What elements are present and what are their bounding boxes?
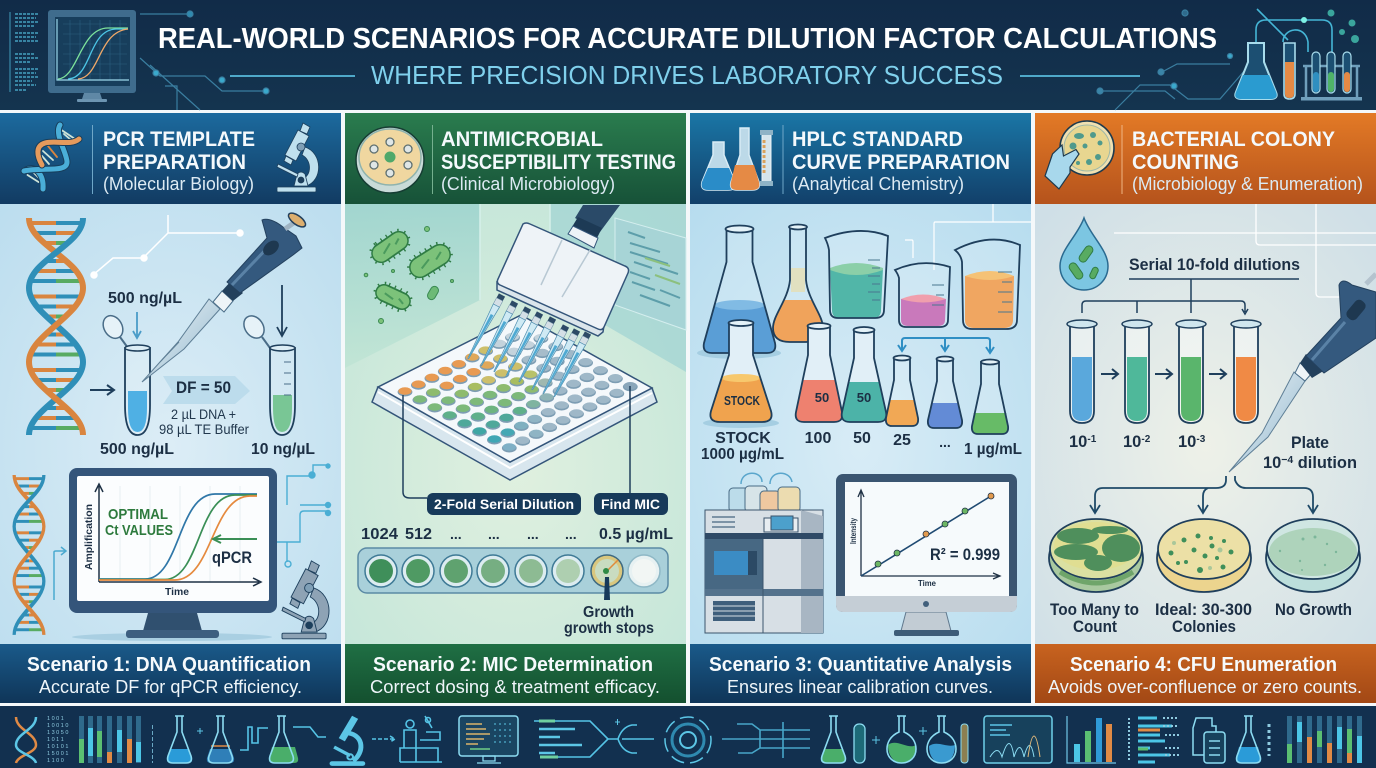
- heading text: CURVE PREPARATION: [792, 151, 1010, 174]
- dilution labels: 10: [1069, 433, 1087, 451]
- icon: DNA and data bars: 1 0 0 1 0: [47, 723, 68, 729]
- dish labels: Ideal: 30-300: [1155, 601, 1252, 619]
- scenario footer: Ensures linear calibration curves.: [727, 677, 993, 697]
- large DNA helix: [29, 218, 83, 435]
- label: growth stops: Growth: [583, 604, 634, 621]
- icon: bottles and clipboard: [1193, 718, 1225, 763]
- plate wells: [398, 333, 638, 452]
- icon: DNA and data bars: 1 0 1 1: [47, 737, 64, 743]
- microscope: [282, 561, 329, 639]
- icon: data bars right: [1287, 716, 1362, 763]
- badge: 2-fold serial dilution: [427, 493, 581, 515]
- flask: blue small: [928, 356, 962, 428]
- flask concentration labels: 1 µg/mL: [964, 441, 1022, 458]
- panel: HPLC standard curve preparation: [690, 113, 1031, 703]
- flask: green small: [972, 360, 1008, 434]
- flask concentration labels: STOCK: [715, 430, 771, 447]
- icon: circuit lines: [722, 722, 810, 758]
- heading text: PCR TEMPLATE: [103, 128, 255, 151]
- heading text: (Molecular Biology): [103, 174, 254, 194]
- dish labels: Too Many to: [1050, 601, 1139, 619]
- water droplet with bacteria: [1060, 218, 1108, 290]
- circuit traces right: [277, 464, 330, 567]
- scenario footer: Scenario 1: DNA Quantification: [27, 654, 311, 676]
- concentration labels: 1024: [361, 526, 398, 543]
- flask: 50: [842, 327, 886, 422]
- arrow: DNA to tube: [90, 385, 114, 395]
- dish labels: No Growth: [1275, 601, 1352, 619]
- qPCR chart: Time: [165, 586, 189, 598]
- circuit decoration: [91, 215, 243, 278]
- scenario footer: Accurate DF for qPCR efficiency.: [39, 677, 302, 697]
- flask: stock: STOCK: [724, 394, 760, 408]
- label: plate dilution: dilution: [1293, 454, 1357, 472]
- scenario footer: [0, 644, 341, 703]
- dilution factor callout: [159, 376, 250, 437]
- dish labels: [1050, 601, 1352, 636]
- qPCR chart: Ct VALUES: [105, 522, 173, 539]
- pipette: [1229, 274, 1376, 472]
- flask concentration labels: ...: [939, 434, 951, 450]
- dish: ideal colonies: [1157, 519, 1251, 592]
- flask concentration labels: 1000 µg/mL: [701, 446, 784, 463]
- panel heading bar: [690, 113, 1031, 204]
- icon: microscope: [332, 717, 363, 764]
- qPCR chart: Amplification: [83, 504, 95, 570]
- icon: data lines converging: [534, 719, 654, 757]
- qPCR chart: qPCR: [212, 549, 252, 567]
- icon: flasks and test tubes: [1235, 9, 1362, 100]
- panel heading bar: [1035, 113, 1376, 204]
- label: final concentration: 10 ng/µL: [251, 441, 315, 458]
- heading text: [103, 128, 255, 194]
- icon: lab workstation: [400, 716, 442, 762]
- heading text: SUSCEPTIBILITY TESTING: [441, 151, 676, 174]
- dilution factor callout: 98 µL TE Buffer: [159, 422, 249, 437]
- icon: bar chart: [1067, 716, 1116, 763]
- panel heading bar: [0, 113, 341, 204]
- panel heading bar: [345, 113, 686, 204]
- diluted tube: [240, 312, 295, 435]
- panel: PCR template preparation: [0, 113, 341, 703]
- icon: flasks and column: [702, 128, 773, 190]
- label: plate dilution: [1263, 434, 1357, 472]
- panel: bacterial colony counting: [1035, 113, 1376, 703]
- scenario footer: Scenario 3: Quantitative Analysis: [709, 654, 1012, 676]
- dilution tubes: [1067, 320, 1261, 423]
- dilution labels: -3: [1196, 434, 1206, 445]
- heading text: ANTIMICROBIAL: [441, 128, 603, 151]
- circuit decoration: [1114, 204, 1376, 297]
- badge: find MIC: [594, 493, 668, 515]
- qPCR monitor: [69, 468, 277, 641]
- flask: 50: 50: [857, 390, 871, 405]
- icon: monitor with amplification curves: [10, 10, 136, 102]
- icon: DNA and data bars: 1 3 0 5 0: [47, 730, 68, 736]
- bacteria illustration: [364, 226, 454, 324]
- concentration labels: ...: [488, 526, 500, 542]
- icon: DNA helix: [24, 125, 79, 189]
- icon: petri dish with discs: [356, 127, 424, 193]
- dilution labels: [1069, 433, 1206, 451]
- data screen on wall: [615, 218, 686, 330]
- title: REAL-WORLD SCENARIOS FOR ACCURATE DILUTION FACTOR CALCULATIONS: [158, 23, 1217, 55]
- subtitle: WHERE PRECISION DRIVES LABORATORY SUCCESS: [371, 60, 1003, 90]
- dish labels: Count: [1073, 618, 1117, 636]
- beaker: pink: [895, 263, 950, 327]
- label: plate dilution: 10: [1263, 454, 1281, 472]
- scenario footer: Correct dosing & treatment efficacy.: [370, 677, 660, 697]
- flask: 100: [796, 323, 842, 422]
- icon: DNA and data bars: 1 1 0 0: [47, 758, 64, 764]
- heading text: [1132, 128, 1363, 194]
- flask: blue Erlenmeyer: [697, 226, 781, 359]
- icon: target circle: [665, 717, 711, 763]
- HPLC instrument: [705, 473, 823, 633]
- flask: volumetric orange: [773, 224, 823, 342]
- flask concentration labels: 100: [805, 430, 831, 447]
- dilution labels: -1: [1087, 434, 1097, 445]
- qPCR chart: [83, 484, 261, 598]
- heading text: [792, 128, 1010, 194]
- MIC well strip: [358, 548, 668, 600]
- icon: flasks and tubes: [821, 716, 968, 763]
- icon: gloved hand holding dish: [1045, 121, 1114, 189]
- dish: no growth: [1266, 519, 1360, 592]
- qPCR chart: OPTIMAL: [108, 506, 168, 523]
- heading: serial dilutions: Serial 10-fold dilutions: [1129, 255, 1300, 274]
- icon: chromatogram screen: [984, 716, 1052, 763]
- header banner: [0, 0, 1376, 110]
- label: plate dilution: Plate: [1291, 434, 1329, 452]
- scenario footer: Avoids over-confluence or zero counts.: [1048, 677, 1362, 697]
- circuit decoration: [905, 204, 1031, 270]
- dilution labels: -2: [1141, 434, 1151, 445]
- flask: 25: [886, 356, 918, 426]
- scenario footer: [690, 644, 1031, 703]
- pipette tips: [465, 293, 591, 398]
- beaker: orange: [955, 240, 1020, 329]
- dilution labels: 10: [1123, 433, 1141, 451]
- icon: DNA and data bars: 1 5 0 0 1: [47, 751, 68, 757]
- heading text: [441, 128, 676, 194]
- 96-well plate: [372, 315, 657, 480]
- callout line: 2-fold: [403, 395, 427, 498]
- concentration labels: 0.5 µg/mL: [599, 526, 673, 543]
- arrows: distribute to flasks: [898, 338, 994, 353]
- concentration labels: ...: [450, 526, 462, 542]
- label: growth stops: growth stops: [564, 620, 654, 637]
- label: stock concentration: 500 ng/µL: [108, 290, 182, 307]
- concentration labels: ...: [527, 526, 539, 542]
- bottom icon strip: [0, 706, 1376, 768]
- icon: data list: [1129, 718, 1179, 762]
- icon: DNA and data bars: 1 0 1 0 1: [47, 744, 68, 750]
- header circuit traces: [140, 10, 1258, 110]
- MIC endpoint well: [591, 555, 623, 600]
- icon: flask sequence: [167, 716, 326, 763]
- icon: code monitor: [459, 716, 518, 763]
- arrow: into diluted tube: [277, 285, 287, 336]
- heading text: (Clinical Microbiology): [441, 174, 615, 194]
- icon: arrow: [372, 736, 395, 742]
- callout line: find MIC: [629, 386, 631, 493]
- calibration chart: [849, 490, 1000, 588]
- heading text: BACTERIAL COLONY: [1132, 128, 1335, 151]
- calibration chart: Intensity: [849, 518, 858, 544]
- multichannel pipette: [465, 205, 629, 398]
- icon: microscope: [277, 123, 319, 192]
- source tube: [99, 312, 150, 435]
- arrow: DNA to qPCR monitor: [54, 547, 66, 600]
- icon: DNA and data bars: 1 0 0 1: [47, 716, 64, 722]
- dilution branch lines: [1082, 279, 1299, 314]
- icon: flask with beads: [1236, 716, 1269, 763]
- flask concentration labels: 50: [853, 430, 871, 447]
- small DNA helix: [14, 475, 44, 635]
- flask: 100: 50: [815, 390, 829, 405]
- label: source concentration: 500 ng/µL: [100, 441, 174, 458]
- dilution factor callout: DF = 50: [176, 378, 231, 397]
- beaker: green: [825, 231, 888, 318]
- flask: stock: [703, 320, 779, 428]
- plating branch arrows: [1090, 476, 1318, 513]
- calibration monitor: [836, 474, 1017, 636]
- panel: antimicrobial susceptibility testing: [345, 113, 686, 703]
- calibration chart: R² = 0.999: [930, 546, 1000, 564]
- flask concentration labels: [701, 430, 1022, 463]
- badge: 2-fold serial dilution: 2-Fold Serial Dilution: [434, 496, 574, 512]
- scenario footer: Scenario 2: MIC Determination: [373, 654, 653, 676]
- scenario footer: Scenario 4: CFU Enumeration: [1070, 654, 1337, 676]
- heading text: PREPARATION: [103, 151, 246, 174]
- arrow: into source tube: [133, 312, 141, 338]
- dish labels: Colonies: [1172, 618, 1236, 636]
- label: growth stops: [564, 604, 654, 637]
- dish: too many to count: [1049, 519, 1143, 592]
- heading text: HPLC STANDARD: [792, 128, 963, 151]
- pipette: [142, 210, 308, 382]
- concentration labels: [361, 526, 673, 543]
- dilution factor callout: 2 µL DNA +: [171, 407, 236, 422]
- scenario footer: [345, 644, 686, 703]
- flask concentration labels: 25: [893, 432, 911, 449]
- calibration chart: Time: [918, 578, 936, 588]
- badge: find MIC: Find MIC: [601, 496, 660, 512]
- dilution labels: 10: [1178, 433, 1196, 451]
- arrows between tubes: [1101, 369, 1226, 379]
- label: plate dilution: −4: [1281, 454, 1293, 466]
- heading text: COUNTING: [1132, 151, 1239, 174]
- concentration labels: ...: [565, 526, 577, 542]
- scenario footer: [1035, 644, 1376, 703]
- heading text: (Analytical Chemistry): [792, 174, 964, 194]
- concentration labels: 512: [405, 526, 432, 543]
- heading text: (Microbiology & Enumeration): [1132, 174, 1363, 194]
- icon: DNA and data bars: [16, 716, 152, 764]
